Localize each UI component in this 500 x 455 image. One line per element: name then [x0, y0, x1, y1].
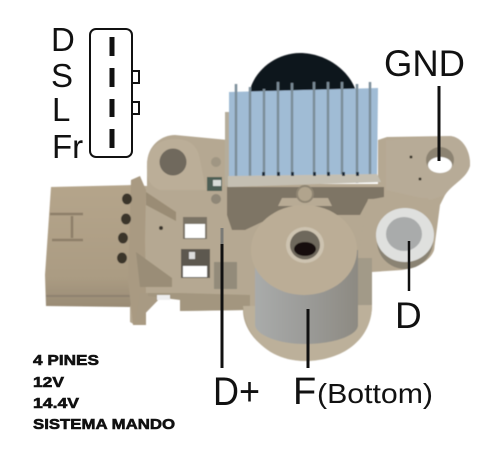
- flange F: [243, 305, 372, 361]
- fin foot dots: [262, 172, 359, 176]
- pin labels: S: [51, 57, 73, 94]
- darker housing recess: [227, 187, 384, 230]
- housing: [130, 135, 470, 361]
- green terminal: [207, 177, 222, 191]
- GND lug: [386, 136, 470, 200]
- callout: GND: [384, 43, 465, 161]
- lower body shadow: [148, 293, 250, 311]
- terminal eyelet: [211, 194, 221, 204]
- connector pin notches: [117, 194, 132, 264]
- connector shroud: [45, 185, 133, 307]
- heatsink base: [228, 174, 381, 187]
- callout: D: [395, 241, 422, 336]
- cylinder F: [255, 250, 358, 344]
- side wall: [355, 258, 372, 308]
- slot beside D+: [214, 262, 237, 289]
- cylinder top: [251, 205, 357, 295]
- gusset ribs: [146, 192, 176, 221]
- hole: GND: [426, 147, 454, 173]
- connector diagram: [90, 29, 139, 157]
- callout: F (Bottom): (Bottom): [317, 378, 433, 409]
- pin labels: L: [52, 91, 70, 128]
- heatsink: [229, 88, 378, 184]
- white tab: [157, 295, 170, 300]
- pin labels: [51, 21, 83, 165]
- D lug: [358, 198, 437, 269]
- callout: F (Bottom): [293, 309, 433, 413]
- spec list: [33, 352, 175, 433]
- boss above cylinder: [278, 186, 332, 206]
- heatsink left edge: [225, 112, 231, 186]
- pinout legend: [51, 21, 139, 165]
- small hole: [159, 226, 163, 230]
- body windows: [183, 217, 207, 239]
- heatsink fins: [236, 82, 370, 183]
- spec list: 14.4V: [33, 395, 79, 412]
- pin labels: Fr: [52, 128, 83, 165]
- regulator body: [45, 53, 470, 361]
- callout: GND: GND: [384, 43, 465, 84]
- connector ribs: [50, 214, 83, 240]
- callout: D: D: [395, 295, 422, 336]
- spec list: 12V: [33, 374, 64, 391]
- callout: D+: D+: [213, 370, 260, 414]
- black dome: [249, 53, 357, 95]
- callout: F (Bottom): F: [293, 371, 316, 413]
- ear: top-left mounting: [147, 139, 206, 190]
- small boss: [211, 157, 221, 167]
- hole: top-left: [160, 148, 186, 176]
- spec list: 4 PINES: [33, 352, 99, 369]
- spec list: SISTEMA MANDO: [33, 416, 175, 433]
- cylinder hole: [286, 227, 324, 263]
- lug holes: [410, 156, 412, 158]
- pin labels: D: [51, 21, 75, 58]
- washer D: [376, 208, 434, 269]
- connector flange: [128, 176, 146, 325]
